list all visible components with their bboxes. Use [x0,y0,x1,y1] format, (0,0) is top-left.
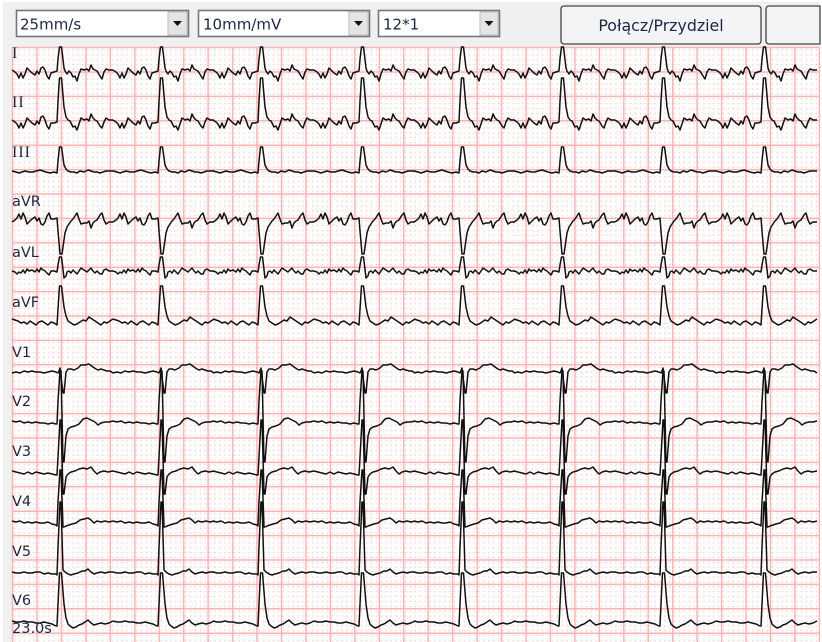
lead labels: aVR [12,194,41,210]
lead labels: II [12,94,25,111]
lead labels: V4 [12,494,31,510]
time stamp: 23.0s [12,621,52,637]
lead V2 trace [12,371,817,462]
lead labels: V6 [12,593,31,609]
lead labels: I [12,45,18,62]
lead III trace [12,147,817,173]
speed dropdown: 25mm/s [20,16,81,34]
lead labels: V2 [12,394,31,410]
lead labels: V3 [12,444,31,460]
lead V1 trace [12,364,817,393]
lead labels: III [12,144,31,161]
button: connect/assign [561,6,761,44]
layout dropdown [378,10,500,36]
lead I trace [12,47,817,81]
gain dropdown [198,10,370,36]
lead V3 trace [12,420,817,494]
lead V5 trace [12,502,817,575]
lead labels: aVL [12,245,39,261]
lead labels: aVF [12,295,39,311]
speed dropdown [16,10,188,36]
lead aVR trace [12,213,817,254]
layout dropdown: 12*1 [383,16,419,34]
button: cropped second button [766,6,820,44]
lead aVL trace [12,257,817,278]
button: connect/assign: Połącz/Przydziel [598,16,724,35]
lead V4 trace [12,470,817,527]
lead V6 trace [12,573,817,628]
gain dropdown: 10mm/mV [203,16,282,34]
lead labels: V1 [12,345,31,361]
lead II trace [12,78,817,130]
lead aVF trace [12,286,817,325]
lead labels [12,45,41,609]
lead labels: V5 [12,544,31,560]
